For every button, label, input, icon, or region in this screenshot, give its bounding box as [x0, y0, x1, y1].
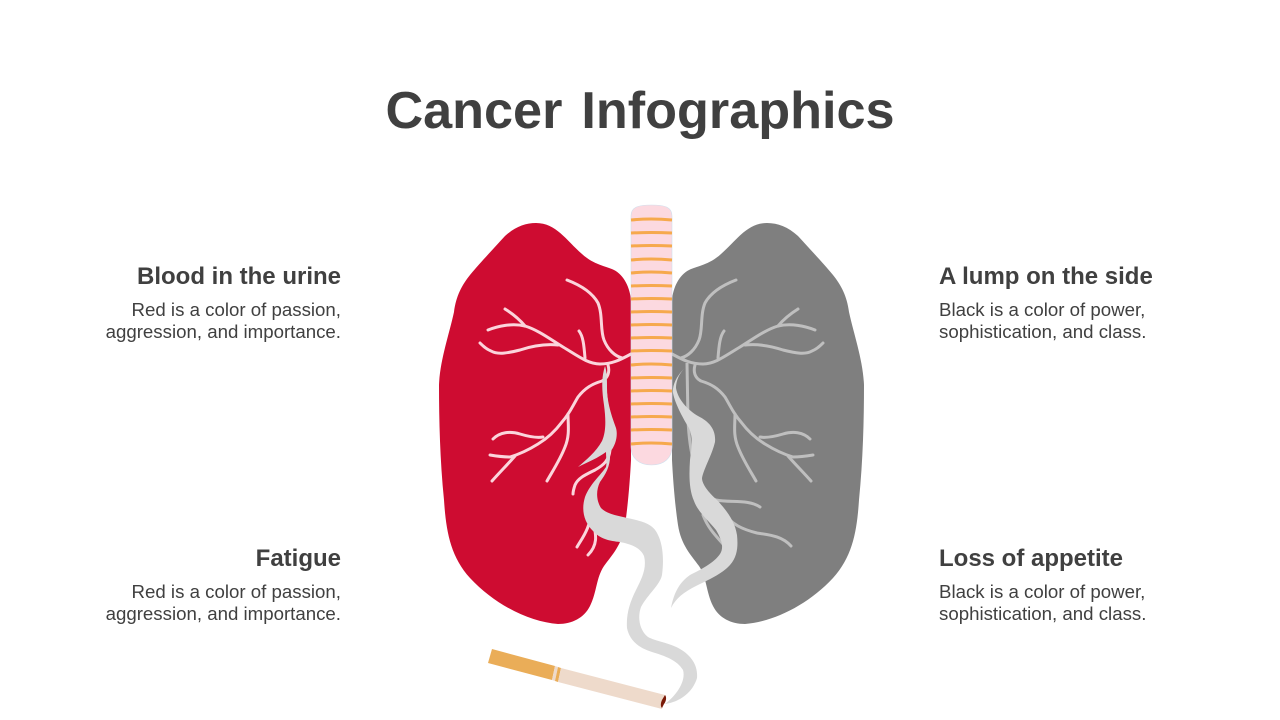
text block: blood in the urine [106, 263, 341, 342]
left lung (red) [439, 223, 631, 624]
text block: blood in the urine: Blood in the urine [137, 263, 341, 290]
title: Cancer Infographics [385, 82, 895, 140]
text block: a lump on the side: sophistication, and class. [939, 321, 1146, 342]
trachea [631, 205, 672, 465]
text block: blood in the urine: Red is a color of passion, [132, 299, 341, 320]
text block: fatigue: aggression, and importance. [106, 603, 341, 624]
cigarette [488, 649, 666, 709]
smoke: main plume [578, 366, 697, 704]
text block: loss of appetite [939, 545, 1146, 624]
smoke: right plume [671, 367, 737, 608]
text block: blood in the urine: aggression, and importance. [106, 321, 341, 342]
text block: fatigue [106, 545, 341, 624]
text block: loss of appetite: sophistication, and class. [939, 603, 1146, 624]
text block: a lump on the side: Black is a color of power, [939, 299, 1145, 320]
text block: loss of appetite: Loss of appetite [939, 545, 1123, 572]
text block: a lump on the side [939, 263, 1153, 342]
right lung (grey) [672, 223, 864, 624]
text block: fatigue: Fatigue [256, 545, 341, 572]
text block: loss of appetite: Black is a color of power, [939, 581, 1145, 602]
text block: fatigue: Red is a color of passion, [132, 581, 341, 602]
text block: a lump on the side: A lump on the side [939, 263, 1153, 290]
